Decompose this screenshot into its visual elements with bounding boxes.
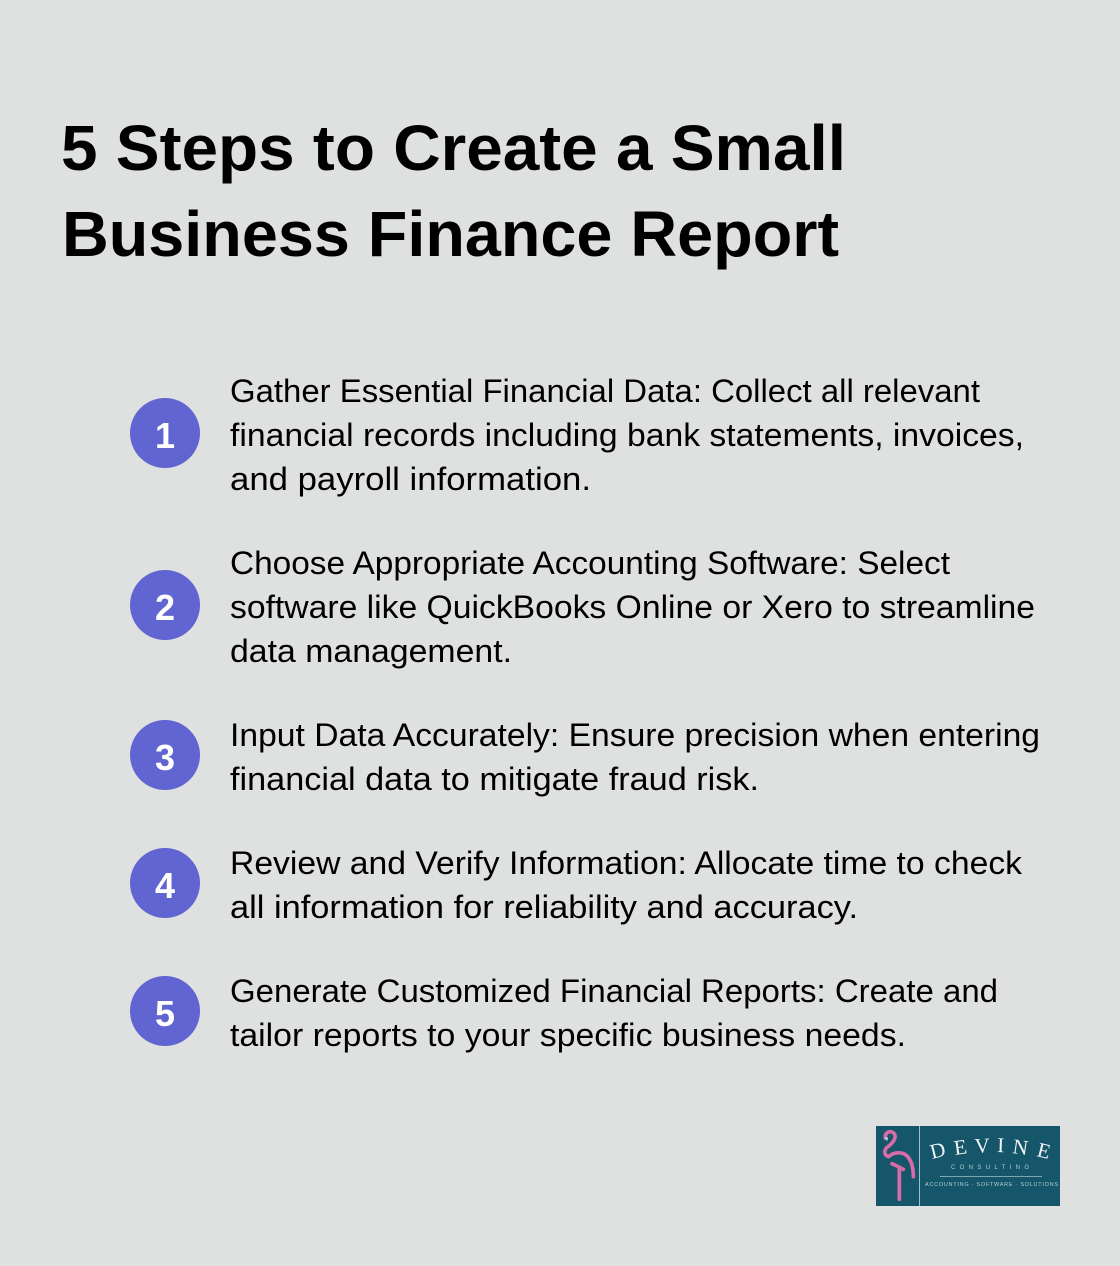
step 1 number badge [130, 398, 200, 468]
step 2 text: Choose Appropriate Accounting Software: Select [230, 545, 950, 581]
step 2 text: software like QuickBooks Online or Xero to streamline [230, 589, 1035, 625]
step 3 text: financial data to mitigate fraud risk. [230, 761, 759, 797]
step 2 text [230, 545, 1035, 669]
logo wordmark: E [952, 1134, 968, 1160]
step 5 number badge [130, 976, 200, 1046]
step 1 text: Gather Essential Financial Data: Collect all relevant [230, 373, 980, 409]
step 5 text [230, 973, 998, 1053]
step 4 text [230, 845, 1023, 925]
step 3 number badge: 3 [155, 737, 175, 778]
step 2 [130, 545, 1035, 669]
logo subtitle: CONSULTING [951, 1165, 1029, 1171]
step 5 text: Generate Customized Financial Reports: Create and [230, 973, 998, 1009]
logo tagline: ACCOUNTING · SOFTWARE · SOLUTIONS [925, 1182, 1058, 1188]
step 1 [130, 373, 1024, 497]
step 4 number badge: 4 [155, 865, 175, 906]
logo wordmark: D [927, 1137, 948, 1164]
step 1 text [230, 373, 1024, 497]
logo wordmark: I [997, 1133, 1005, 1157]
step 5 [130, 973, 998, 1053]
step 1 text: financial records including bank statements, invoices, [230, 417, 1024, 453]
logo wordmark [927, 1133, 1053, 1164]
icon: flamingo [884, 1132, 913, 1199]
title: Business Finance Report [62, 198, 839, 270]
title [61, 112, 846, 270]
step 2 number badge: 2 [155, 587, 175, 628]
logo wordmark: V [974, 1133, 990, 1158]
step 4 text: all information for reliability and accuracy. [230, 889, 858, 925]
step 4 [130, 845, 1023, 925]
step 1 text: and payroll information. [230, 461, 591, 497]
logo: Devine Consulting [876, 1126, 1060, 1206]
logo wordmark: E [1035, 1138, 1053, 1164]
step 3 text [230, 717, 1040, 797]
step 4 number badge [130, 848, 200, 918]
step 1 number badge: 1 [155, 415, 175, 456]
step 3 [130, 717, 1040, 797]
step 5 number badge: 5 [155, 993, 175, 1034]
step 3 number badge [130, 720, 200, 790]
step 4 text: Review and Verify Information: Allocate time to check [230, 845, 1023, 881]
step 2 number badge [130, 570, 200, 640]
step 3 text: Input Data Accurately: Ensure precision when entering [230, 717, 1040, 753]
step 2 text: data management. [230, 633, 512, 669]
title: 5 Steps to Create a Small [61, 112, 846, 184]
logo wordmark: N [1011, 1134, 1030, 1160]
step 5 text: tailor reports to your specific business needs. [230, 1017, 906, 1053]
